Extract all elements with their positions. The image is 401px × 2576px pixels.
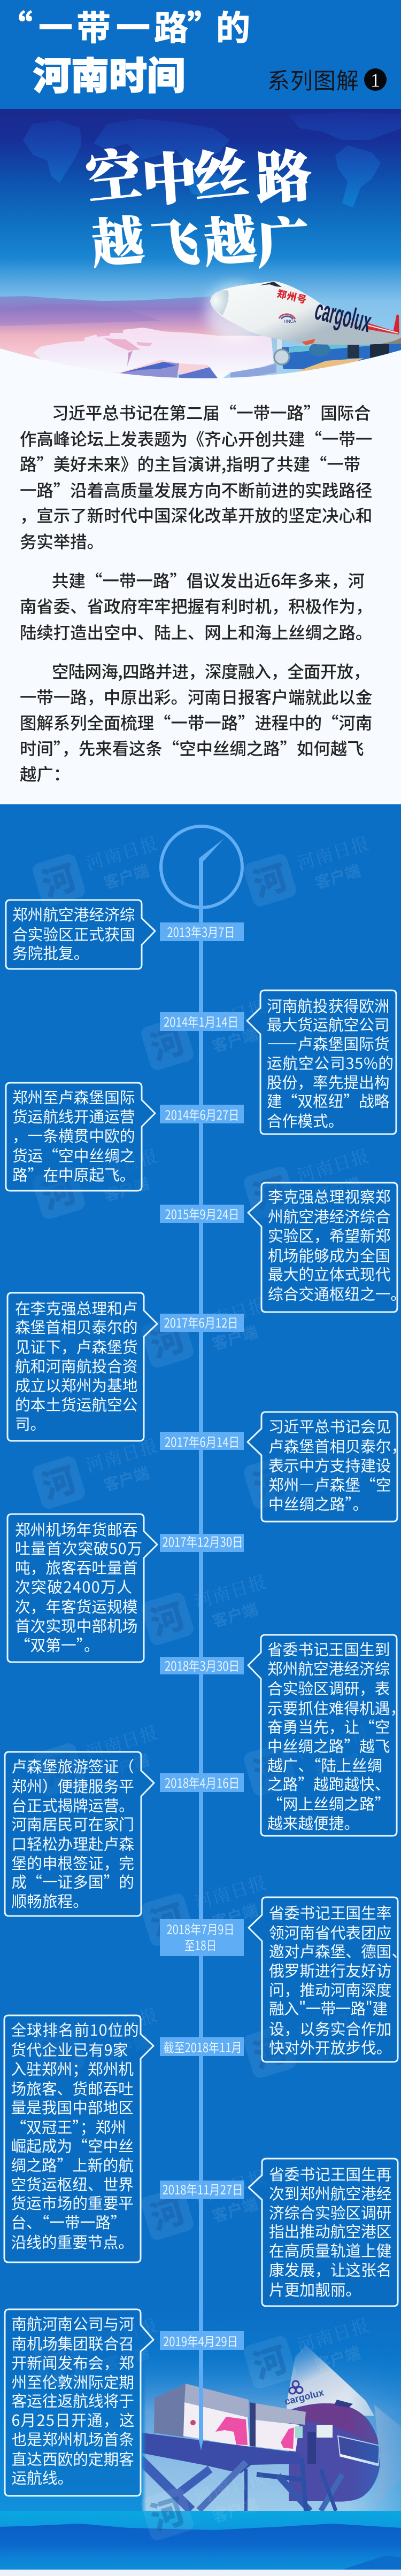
watermarks: 河 (144, 1890, 190, 1945)
watermarks: 河南日报 (294, 829, 373, 875)
intro paragraph 1: 习近平总书记在第二届“一带一路”国际合 (52, 400, 371, 424)
airplane (206, 281, 401, 377)
watermarks: 客户端 (101, 2030, 152, 2065)
hero banner (0, 109, 401, 387)
orange door mark (302, 339, 315, 345)
bottom mountain band (0, 2511, 401, 2570)
watermarks: 客户端 (101, 1171, 152, 1206)
callout (7, 1293, 157, 1441)
event 2017-06-12 (7, 1293, 244, 1441)
airport ground (278, 339, 401, 377)
callout: “双冠王”；郑州 (11, 2116, 126, 2138)
watermarks: 河南日报 (191, 2463, 270, 2509)
watermarks: 客户端 (312, 2030, 363, 2065)
calligraphic title: line two: 广 (255, 199, 312, 279)
series number badge: 1 (371, 69, 380, 91)
callout: 机场能够成为全国 (268, 1244, 390, 1266)
intro paragraph 3: 图解系列全面梳理“一带一路”进程中的“河南 (20, 710, 372, 734)
title line 1: “一带一路”的 (0, 1, 250, 50)
watermarks: 客户端 (312, 1748, 363, 1783)
watermarks: 河南日报 (191, 993, 270, 1039)
callout: 河南居民可在家门 (12, 1813, 134, 1835)
date tag: 2017年6月14日 (165, 1432, 240, 1450)
callout: 南机场集团联合召 (12, 2332, 134, 2354)
map land (33, 328, 276, 381)
event 2013-03-07 (6, 900, 244, 969)
HNCA logo (279, 314, 296, 324)
header band (0, 0, 401, 109)
callout: 融入"一带一路"建 (269, 1997, 388, 2019)
callout (6, 900, 155, 969)
watermarks: 客户端 (209, 1022, 260, 1057)
radome (210, 290, 228, 315)
event 2019-04-29 (5, 2309, 244, 2496)
callout (248, 1183, 401, 1312)
cockpit windows (259, 282, 282, 287)
watermarks: 河南日报 (82, 2311, 161, 2357)
callout: 俄罗斯进行友好访 (269, 1959, 391, 1981)
callout: 路”在中原起飞。 (12, 1163, 135, 1185)
callout: 成“一证多国”的 (12, 1871, 134, 1892)
callout: 郑州至卢森堡国际 (12, 1086, 135, 1108)
watermarks: 河 (35, 850, 81, 906)
watermarks: 客户端 (312, 1171, 363, 1206)
date tag: 2018年3月30日 (165, 1656, 240, 1674)
watermarks: 客户端 (101, 1748, 152, 1783)
watermarks: 客户端 (101, 858, 152, 894)
callout: 吨，旅客吞吐量首 (15, 1556, 138, 1578)
bottom cargo photo (140, 2345, 401, 2511)
intro paragraph 1: 一路”沿着高质量发展方向不断前进的实践路径 (20, 478, 372, 502)
calligraphic title: line two: 越 (88, 199, 146, 278)
date tag: 2013年3月7日 (167, 922, 235, 941)
callout: 吐量首次突破50万 (15, 1537, 142, 1559)
callout: 货运“空中丝绸之 (12, 1144, 135, 1166)
callout: 台正式揭牌运营。 (12, 1794, 134, 1816)
intro paragraph 3: 时间”，先来看这条“空中丝绸之路”如何越飞 (20, 736, 364, 760)
calligraphic title: line one: 丝 (188, 128, 252, 214)
callout: 省委书记王国生到 (267, 1638, 390, 1660)
HNCA logo: HNCA (284, 319, 296, 324)
watermarks: 河南日报 (294, 1142, 373, 1188)
date tag: 至18日 (184, 1935, 217, 1954)
watermarks: 客户端 (312, 2340, 363, 2376)
watermarks: 客户端 (312, 1461, 363, 1496)
watermarks: 河南日报 (82, 829, 161, 875)
callout: 全球排名前10位的 (11, 2019, 139, 2040)
calligraphic title: line two: 飞 (148, 204, 202, 276)
engine (309, 343, 330, 356)
callout: 建“双枢纽”战略 (267, 1090, 390, 1112)
callout: 司。 (15, 1413, 45, 1434)
first cargo container (154, 2384, 250, 2448)
event 2018-07-09 to 18 (160, 1897, 401, 2062)
event 2015-09-24 (160, 1183, 401, 1312)
callout: 入驻郑州；郑州机 (11, 2058, 134, 2080)
callout: 见证下，卢森堡货 (15, 1336, 138, 1357)
wing (366, 335, 401, 344)
date tag: 2017年6月12日 (164, 1313, 238, 1331)
callout: 场旅客、货邮吞吐 (11, 2077, 134, 2099)
tail fin (393, 314, 399, 333)
title line 2: 河南时间 (33, 46, 185, 100)
callout (248, 1412, 401, 1522)
callout: 中丝绸之路”。 (268, 1493, 368, 1515)
callout: 实验区，希望新郑 (268, 1224, 390, 1246)
intro paragraph 3: 空陆网海,四路并进，深度融入，全面开放， (52, 659, 370, 683)
watermarks: 客户端 (209, 2192, 260, 2227)
date tag: 2015年9月24日 (165, 1204, 240, 1223)
watermarks: 河 (144, 2484, 190, 2540)
aircraft tail (287, 2345, 374, 2416)
Zhengzhou name: 郑州号 (276, 286, 309, 307)
watermarks: 河南日报 (294, 2001, 373, 2047)
date tag (160, 1919, 244, 1956)
intro paragraph 3: 一带一路，中原出彩。河南日报客户端就此以金 (20, 685, 372, 709)
watermarks: 河 (246, 1163, 292, 1219)
loader deck (142, 2433, 300, 2473)
intro paragraph 1: 务实举措。 (20, 529, 104, 553)
watermarks: 河南日报 (294, 1432, 373, 1478)
callout: “网上丝绸之路” (267, 1793, 390, 1814)
callout: ，一条横贯中欧的 (12, 1124, 135, 1146)
callout: 州至伦敦洲际定期 (12, 2371, 134, 2393)
watermarks (31, 829, 373, 2542)
watermarks: 客户端 (312, 858, 363, 894)
callout: 郑州）便捷服务平 (12, 1775, 134, 1797)
watermarks: 河 (246, 2332, 292, 2388)
intro paragraph 1: ，宣示了新时代中国深化改革开放的坚定决心和 (20, 503, 372, 527)
callout: 首次实现中部机场 (15, 1615, 138, 1636)
callout: 领河南省代表团应 (269, 1921, 391, 1943)
intro paragraph 1: 路”美好未来》的主旨演讲,指明了共建“一带 (20, 452, 360, 476)
date tag: 2018年7月9日 (167, 1919, 234, 1938)
watermarks: 客户端 (101, 1461, 152, 1496)
callout (249, 1897, 401, 2062)
callout: 货运航线开通运营 (12, 1105, 135, 1127)
callout: 台、“一带一路” (11, 2211, 126, 2233)
callout: 航和河南航投合资 (15, 1355, 138, 1377)
callout (4, 2015, 153, 2262)
intro paragraph 2 (20, 568, 372, 644)
callout: 口轻松办理赴卢森 (12, 1833, 134, 1855)
watermarks: 河 (246, 850, 292, 906)
event 2018-11-27 (160, 2159, 398, 2306)
intro paragraph 1: 作高峰论坛上发表题为《齐心开创共建“一带一 (20, 426, 372, 451)
callout: 成立以郑州为基地 (15, 1374, 138, 1396)
watermarks: 河 (35, 1163, 81, 1219)
callout: 直达西欧的定期客 (12, 2448, 134, 2470)
callout: 卢森堡旅游签证（ (12, 1755, 134, 1777)
watermarks: 河南日报 (191, 1568, 270, 1614)
callout: 中丝绸之路”越飞 (267, 1735, 390, 1757)
watermarks: 河 (35, 1453, 81, 1508)
calligraphic title: line two: 越 (200, 198, 259, 277)
event 2014-01-14 (160, 990, 396, 1134)
livery stripes (366, 322, 399, 335)
date tag: 2017年12月30日 (163, 1532, 243, 1550)
callout: 运航线。 (12, 2466, 73, 2488)
watermarks: 客户端 (209, 2492, 260, 2527)
callout: 指出推动航空港区 (269, 2220, 391, 2242)
callout: 合作模式。 (267, 1109, 343, 1131)
callout: 在高质量轨道上健 (269, 2239, 391, 2261)
event 2017-12-30 (7, 1514, 244, 1662)
callout: 设，以务实合作加 (269, 2018, 391, 2039)
callout: 务院批复。 (12, 942, 89, 964)
callout: 6月25日开通，这 (12, 2409, 135, 2431)
watermarks: 河南日报 (191, 1291, 270, 1337)
watermarks: 河 (144, 1312, 190, 1367)
callout: 最大货运航空公司 (267, 1013, 389, 1035)
calligraphic title: line one: 中 (139, 133, 200, 216)
callout: 次到郑州航空港经 (269, 2182, 391, 2204)
callout: 济综合实验区调研 (269, 2201, 391, 2223)
callout (7, 1514, 157, 1662)
watermarks: 河南日报 (82, 1432, 161, 1478)
callout: 越来越便捷。 (267, 1812, 359, 1834)
watermarks: 客户端 (101, 2340, 152, 2376)
watermarks: 河南日报 (294, 2311, 373, 2357)
callout: ——卢森堡国际货 (267, 1033, 389, 1054)
callout: 习近平总书记会见 (268, 1415, 391, 1437)
callout: 在李克强总理和卢 (15, 1297, 138, 1319)
callout: 郑州航空港经济综 (267, 1657, 390, 1679)
date tag: 2019年4月29日 (163, 2331, 238, 2350)
callout: 河南航投获得欧洲 (267, 995, 389, 1017)
event 2014-06-27 (6, 1083, 244, 1191)
intro paragraph 3: 越广： (20, 762, 70, 786)
intro paragraph 1 (20, 400, 372, 553)
watermarks: 河 (246, 1740, 292, 1795)
mountains and pink haze (0, 296, 289, 374)
callout: 郑州航空港经济综 (12, 903, 135, 925)
second cargo container (250, 2402, 306, 2451)
fuselage (210, 281, 401, 345)
callout: 州航空港经济综合 (268, 1205, 390, 1227)
callout: 表示中方支持建设 (268, 1454, 391, 1476)
open nose fuselage (289, 2400, 401, 2507)
callout: 也是郑州机场首条 (12, 2428, 134, 2450)
callout: 货运市场的重要平 (11, 2192, 134, 2214)
callout: 李克强总理视察郑 (268, 1185, 390, 1207)
callout: 开新闻发布会，郑 (12, 2352, 134, 2373)
callout: 货代企业已有9家 (11, 2038, 128, 2060)
calligraphic title: line two (88, 198, 312, 279)
callout: 股份，率先提出构 (267, 1071, 389, 1093)
watermarks: 河南日报 (191, 2163, 270, 2209)
callout: 堡的申根签证，完 (12, 1852, 134, 1874)
series label: 系列图解 (267, 63, 359, 96)
callout: 空货运枢纽、世界 (11, 2173, 134, 2195)
callout: “双第一”。 (15, 1634, 99, 1656)
event 2017-06-14 (160, 1412, 401, 1522)
watermarks: 河 (35, 2022, 81, 2077)
callout: 森堡首相贝泰尔的 (15, 1316, 138, 1338)
callout: 崛起成为“空中丝 (11, 2135, 134, 2156)
callout: 郑州机场年货邮吞 (15, 1518, 138, 1540)
callout (6, 1083, 155, 1191)
callout: 康发展，让这张名 (269, 2259, 391, 2280)
watermarks: 河 (144, 1589, 190, 1644)
date tag: 2018年4月16日 (165, 1773, 240, 1791)
callout: 绸之路”上新的航 (11, 2154, 134, 2176)
watermarks: 河 (246, 1453, 292, 1508)
date tag: 2014年6月27日 (165, 1105, 240, 1123)
watermarks: 河 (35, 1740, 81, 1795)
callout: 沿线的重要节点。 (11, 2231, 134, 2253)
calligraphic title: line one: 空 (82, 129, 145, 215)
event 2018-03-30 (160, 1635, 401, 1836)
event as of 2018-11 (4, 2015, 244, 2262)
callout: 的本土货运航空公 (15, 1393, 138, 1415)
callout: 次突破2400万人 (15, 1576, 132, 1597)
callout (5, 2309, 153, 2496)
workers near hatch (295, 2425, 333, 2464)
watermarks: 河 (35, 2332, 81, 2388)
callout: 奋勇当先，让“空 (267, 1716, 390, 1737)
intro paragraph 2: 南省委、省政府牢牢把握有利时机，积极作为， (20, 594, 372, 618)
tail logo and name: cargolux (283, 2387, 325, 2407)
callout (249, 2159, 398, 2306)
series number badge (364, 68, 387, 91)
watermarks: 河南日报 (82, 1142, 161, 1188)
intro paragraph 3 (20, 659, 372, 786)
callout: 省委书记王国生再 (269, 2163, 391, 2185)
watermarks: 河南日报 (191, 1869, 270, 1915)
intro paragraph 2: 陆续打造出空中、陆上、网上和海上丝绸之路。 (20, 620, 372, 644)
loader scissor beams (140, 2458, 342, 2511)
callout: 合实验区正式获国 (12, 923, 135, 945)
watermarks: 客户端 (209, 1320, 260, 1355)
landing gear (274, 337, 389, 364)
watermarks: 客户端 (209, 1898, 260, 1933)
watermarks: 河 (246, 2022, 292, 2077)
date tag: 2014年1月14日 (164, 1012, 238, 1030)
tail logo and name (285, 2380, 325, 2405)
timeline axis with clock (161, 826, 242, 2450)
callout: 快对外开放步伐。 (269, 2036, 391, 2058)
callout: 省委书记王国生率 (269, 1902, 391, 1923)
callout: 越广、“陆上丝绸 (267, 1754, 382, 1776)
callout: 片更加靓丽。 (269, 2278, 361, 2300)
calligraphic title: line one (82, 128, 313, 216)
callout (248, 1635, 401, 1836)
callout: 郑州—卢森堡“空 (268, 1473, 391, 1495)
date tag: 截至2018年11月 (164, 2037, 242, 2056)
timeline background (0, 804, 401, 2570)
callout: 之路”越跑越快、 (267, 1773, 390, 1795)
calligraphic title: line one: 路 (254, 131, 313, 214)
watermarks: 河南日报 (82, 1719, 161, 1765)
watermarks: 河 (144, 2184, 190, 2239)
text panel background (0, 348, 401, 805)
photo sky (140, 2357, 401, 2511)
callout: 最大的立体式现代 (268, 1263, 390, 1285)
callout: 量是我国中部地区 (11, 2096, 134, 2118)
watermarks: 客户端 (209, 1597, 260, 1632)
callout: 南航河南公司与河 (12, 2313, 134, 2334)
watermarks: 河南日报 (294, 1719, 373, 1765)
callout (247, 990, 396, 1134)
intro paragraph 2: 共建“一带一路”倡议发出近6年多来，河 (52, 568, 365, 592)
callout: 顺畅旅程。 (12, 1890, 88, 1912)
callout: 问，推动河南深度 (269, 1978, 391, 2000)
date tag: 2018年11月27日 (163, 2179, 243, 2198)
callout: 客运往返航线将于 (12, 2389, 134, 2411)
callout (5, 1752, 154, 1916)
callout: 合实验区调研，表 (267, 1677, 390, 1699)
watermarks: 河南日报 (82, 2001, 161, 2047)
watermarks: 河 (144, 1014, 190, 1069)
faint world map (23, 112, 401, 207)
callout: 运航空公司35%的 (267, 1052, 394, 1074)
callout: 次，年客货运规模 (15, 1595, 138, 1617)
event 2018-04-16 (5, 1752, 244, 1916)
